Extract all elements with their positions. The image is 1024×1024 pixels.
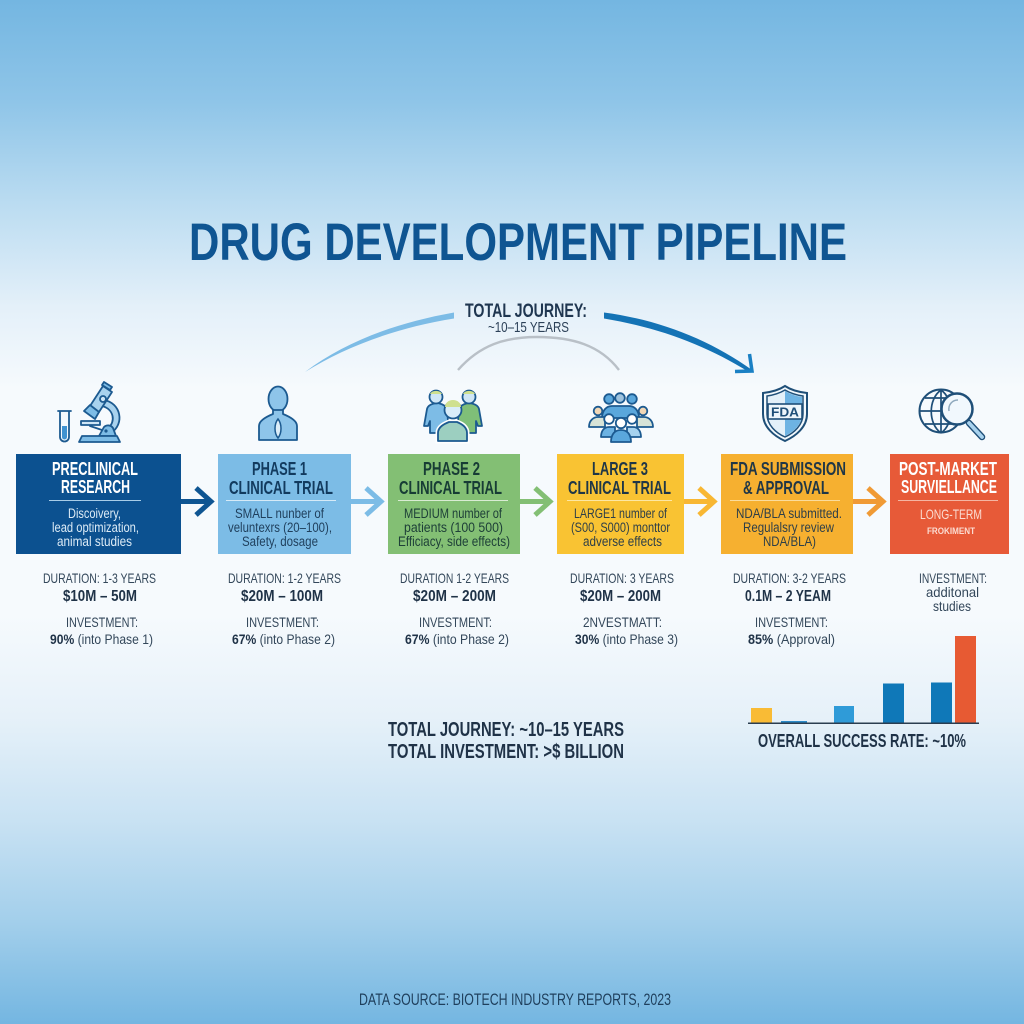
stats: phase 1: 67% (into Phase 2): [232, 631, 335, 647]
heading: [568, 458, 671, 498]
stats: post-market: additonal: [926, 584, 979, 600]
arrow 4: [684, 488, 714, 515]
description: lead optimization,: [52, 520, 139, 535]
label: years: ~10–15 YEARS: [488, 320, 569, 336]
icon: patients group: [424, 390, 482, 442]
totals block: TOTAL JOURNEY: ~10–15 YEARS: [388, 719, 624, 741]
stats: phase 2: DURATION 1-2 YEARS: [400, 570, 509, 586]
stats: FDA: INVESTMENT:: [755, 614, 828, 630]
heading: PHASE 1: [252, 458, 307, 479]
description: veluntexrs (20–100),: [228, 520, 332, 535]
description: Discoivery,: [68, 506, 121, 521]
arc: right dark blue with arrowhead: [604, 312, 752, 372]
stats: FDA: [733, 570, 846, 647]
stats: phase 2: [400, 570, 509, 647]
heading: PRECLINICAL: [52, 458, 138, 479]
stats: phase 1: INVESTMENT:: [246, 614, 319, 630]
panel: large 3: [557, 454, 684, 554]
stats: preclinical: 90% (into Phase 1): [50, 631, 153, 647]
stats: preclinical: DURATION: 1-3 YEARS: [43, 570, 156, 586]
description: LONG-TERM: [920, 506, 982, 522]
total journey arcs and label: [305, 301, 752, 372]
stats: FDA: 85% (Approval): [748, 631, 835, 647]
heading: LARGE 3: [592, 458, 648, 479]
stats: phase 2: INVESTMENT:: [419, 614, 492, 630]
stats: phase 1: $20M – 100M: [241, 588, 323, 605]
description: SMALL nunber of: [235, 506, 324, 521]
stats: phase 1: DURATION: 1-2 YEARS: [228, 570, 341, 586]
stats: large 3: $20M – 200M: [580, 588, 661, 605]
heading: PHASE 2: [423, 458, 480, 479]
description: Regulalsry review: [743, 520, 834, 535]
icon: large crowd: [589, 393, 653, 442]
totals block: [388, 719, 624, 763]
heading: [229, 458, 333, 498]
arrow 1: [181, 488, 211, 515]
heading: [52, 458, 138, 497]
stats: post-market: [919, 570, 987, 614]
arc: left light blue: [305, 312, 454, 372]
description: (S00, S000) monttor: [571, 520, 670, 535]
stats: post-market: INVESTMENT:: [919, 570, 987, 586]
stats: phase 1: [228, 570, 341, 647]
stats: FDA: 0.1M – 2 YEAM: [745, 588, 831, 605]
heading: [899, 458, 998, 497]
description: Efficiacy, side effects): [398, 534, 510, 549]
heading: CLINICAL TRIAL: [229, 477, 333, 498]
heading: [399, 458, 502, 498]
panel: preclinical research: [16, 454, 181, 554]
heading: CLINICAL TRIAL: [399, 477, 502, 498]
description: animal studies: [57, 534, 132, 549]
arc: center grey: [458, 337, 619, 370]
stats: large 3: DURATION: 3 YEARS: [570, 570, 674, 586]
description: patients (100 500): [404, 520, 503, 535]
description: [920, 506, 982, 536]
title: DRUG DEVELOPMENT PIPELINE: [189, 213, 847, 272]
description: NDA/BLA submitted.: [736, 506, 842, 521]
description: Safety, dosage: [242, 534, 318, 549]
stats: phase 2: $20M – 200M: [413, 588, 496, 605]
label: total journey: TOTAL JOURNEY:: [465, 301, 587, 322]
heading: RESEARCH: [61, 476, 130, 497]
icon: microscope and test tube: [58, 382, 120, 442]
icon: FDA shield: [763, 386, 807, 441]
stats: FDA: DURATION: 3-2 YEARS: [733, 570, 846, 586]
panel: FDA submission: [721, 454, 853, 554]
description: MEDIUM number of: [404, 506, 502, 521]
data source: DATA SOURCE: BIOTECH INDUSTRY REPORTS, 2023: [359, 990, 671, 1009]
description: adverse effects: [583, 534, 662, 549]
description: [736, 506, 842, 549]
stats: large 3: [570, 570, 678, 647]
description: NDA/BLA): [763, 534, 816, 549]
arrow 3: [520, 488, 550, 515]
icon: FDA shield: FDA: [771, 404, 800, 420]
description: [571, 506, 670, 549]
heading: [730, 458, 846, 498]
heading: CLINICAL TRIAL: [568, 477, 671, 498]
stats: post-market: studies: [933, 598, 971, 614]
stats: preclinical: INVESTMENT:: [66, 614, 138, 630]
panel: phase 2: [388, 454, 520, 554]
heading: FDA SUBMISSION: [730, 458, 846, 479]
heading: & APPROVAL: [743, 477, 829, 498]
stats: preclinical: [43, 570, 156, 647]
stats: preclinical: $10M – 50M: [63, 588, 137, 605]
arrow 2: [351, 488, 381, 515]
panel: phase 1: [218, 454, 351, 554]
icon: globe and magnifier: [920, 390, 982, 437]
description: LARGE1 number of: [574, 506, 667, 521]
stats: large 3: 2NVESTMATT:: [583, 614, 662, 630]
description: FROKIMENT: [927, 526, 975, 536]
bar chart: [748, 636, 979, 724]
stats: large 3: 30% (into Phase 3): [575, 631, 678, 647]
description: [228, 506, 332, 549]
stats: phase 2: 67% (into Phase 2): [405, 631, 509, 647]
description: [398, 506, 510, 549]
description: [52, 506, 139, 549]
totals block: TOTAL INVESTMENT: >$ BILLION: [388, 741, 624, 763]
icon: volunteer: [259, 386, 297, 440]
panel: post-market: [890, 454, 1009, 554]
arrow 5: [853, 488, 883, 515]
